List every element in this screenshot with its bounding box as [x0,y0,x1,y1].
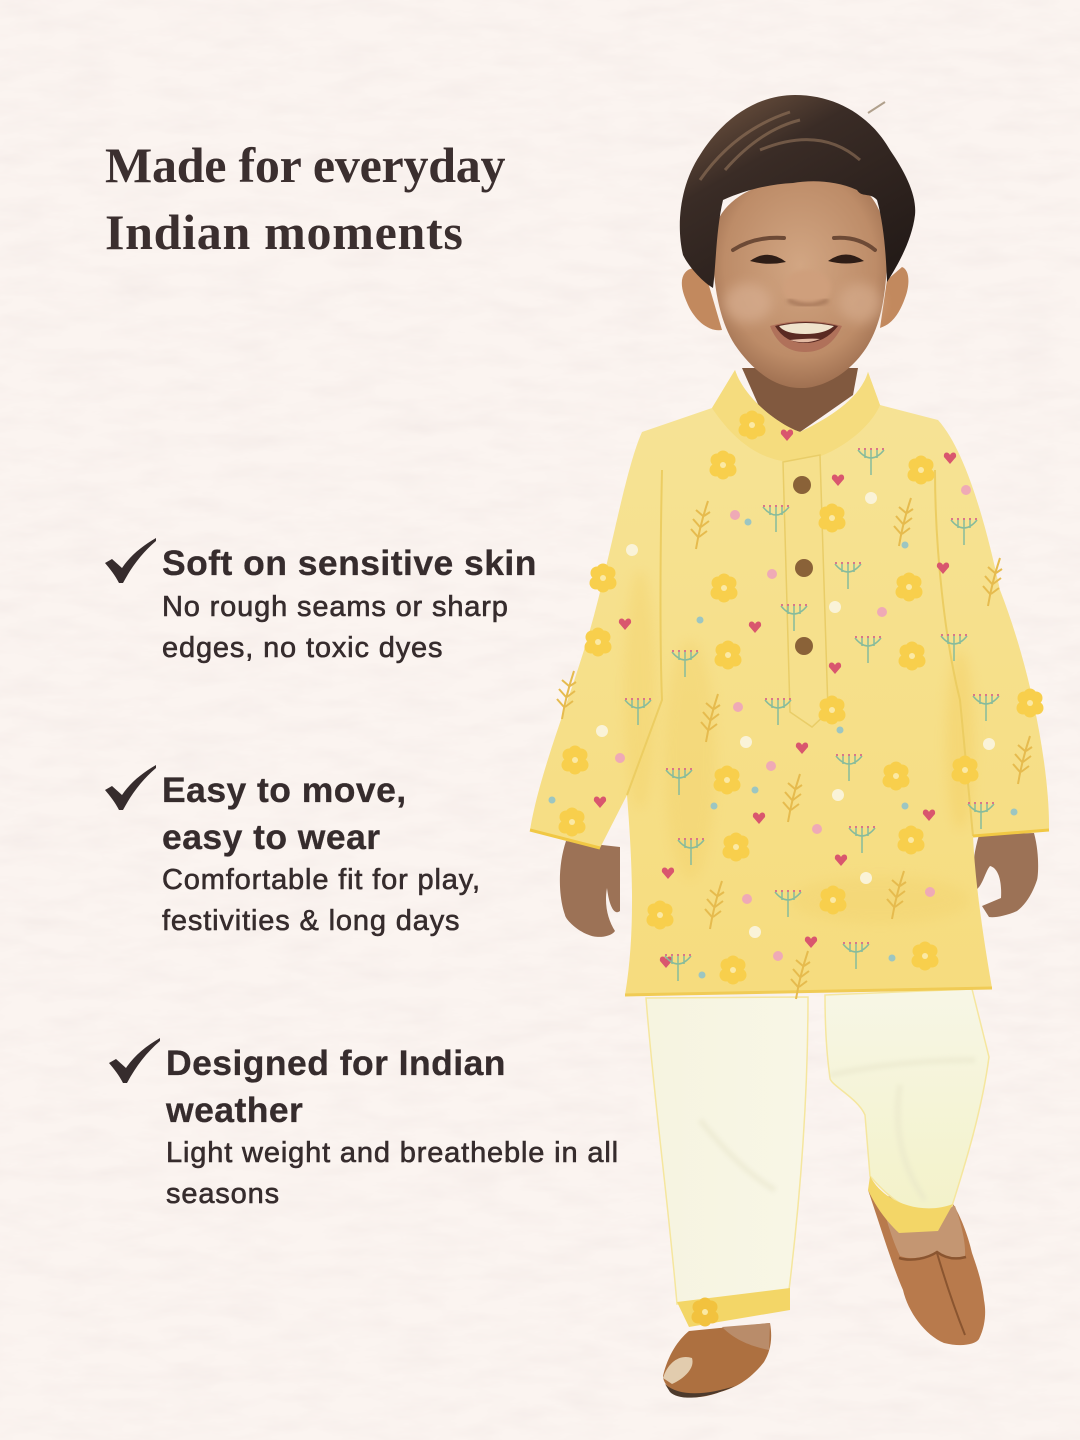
heading [166,1043,506,1130]
kurta [530,370,1049,999]
icon: check mark [109,1038,160,1083]
description: Comfortable fit for play, [162,864,481,896]
print: green sprigs [625,449,999,981]
title: Indian moments [105,204,463,260]
ears [682,268,722,330]
print: yellow flowers [558,410,1044,984]
hands [560,833,1038,937]
print: pale blossoms [615,485,971,961]
head [680,95,915,388]
eyes [750,255,786,264]
print: wheat stems [557,498,1032,999]
benefit: designed for Indian weather [109,1038,619,1210]
hair [680,95,915,288]
title [105,137,505,260]
description [162,864,481,936]
folds and shading [624,570,974,924]
description: No rough seams or sharp [162,591,509,623]
benefit: soft on sensitive skin [105,538,537,664]
benefit: easy to move [105,765,481,936]
description [162,591,509,664]
face [713,177,887,388]
heading: Designed for Indian [166,1043,506,1083]
buttons [793,476,811,494]
neck [742,368,858,432]
smile [770,321,842,352]
eyebrows [733,238,875,250]
description [166,1137,619,1210]
description: seasons [166,1178,280,1210]
icon: check mark [105,538,156,583]
print: blue dots [548,518,1018,978]
trousers [646,989,989,1327]
print: pink hearts [594,430,956,968]
heading: Easy to move, [162,770,407,810]
heading: easy to wear [162,817,381,857]
heading [162,770,407,857]
title: Made for everyday [105,137,505,193]
cheeks and nose [724,283,882,323]
icon: check mark [105,765,156,810]
description: festivities & long days [162,904,460,936]
shoes [663,1190,985,1398]
heading: weather [166,1090,303,1130]
description: edges, no toxic dyes [162,632,443,664]
description: Light weight and breatheble in all [166,1137,619,1169]
heading: Soft on sensitive skin [162,543,537,583]
